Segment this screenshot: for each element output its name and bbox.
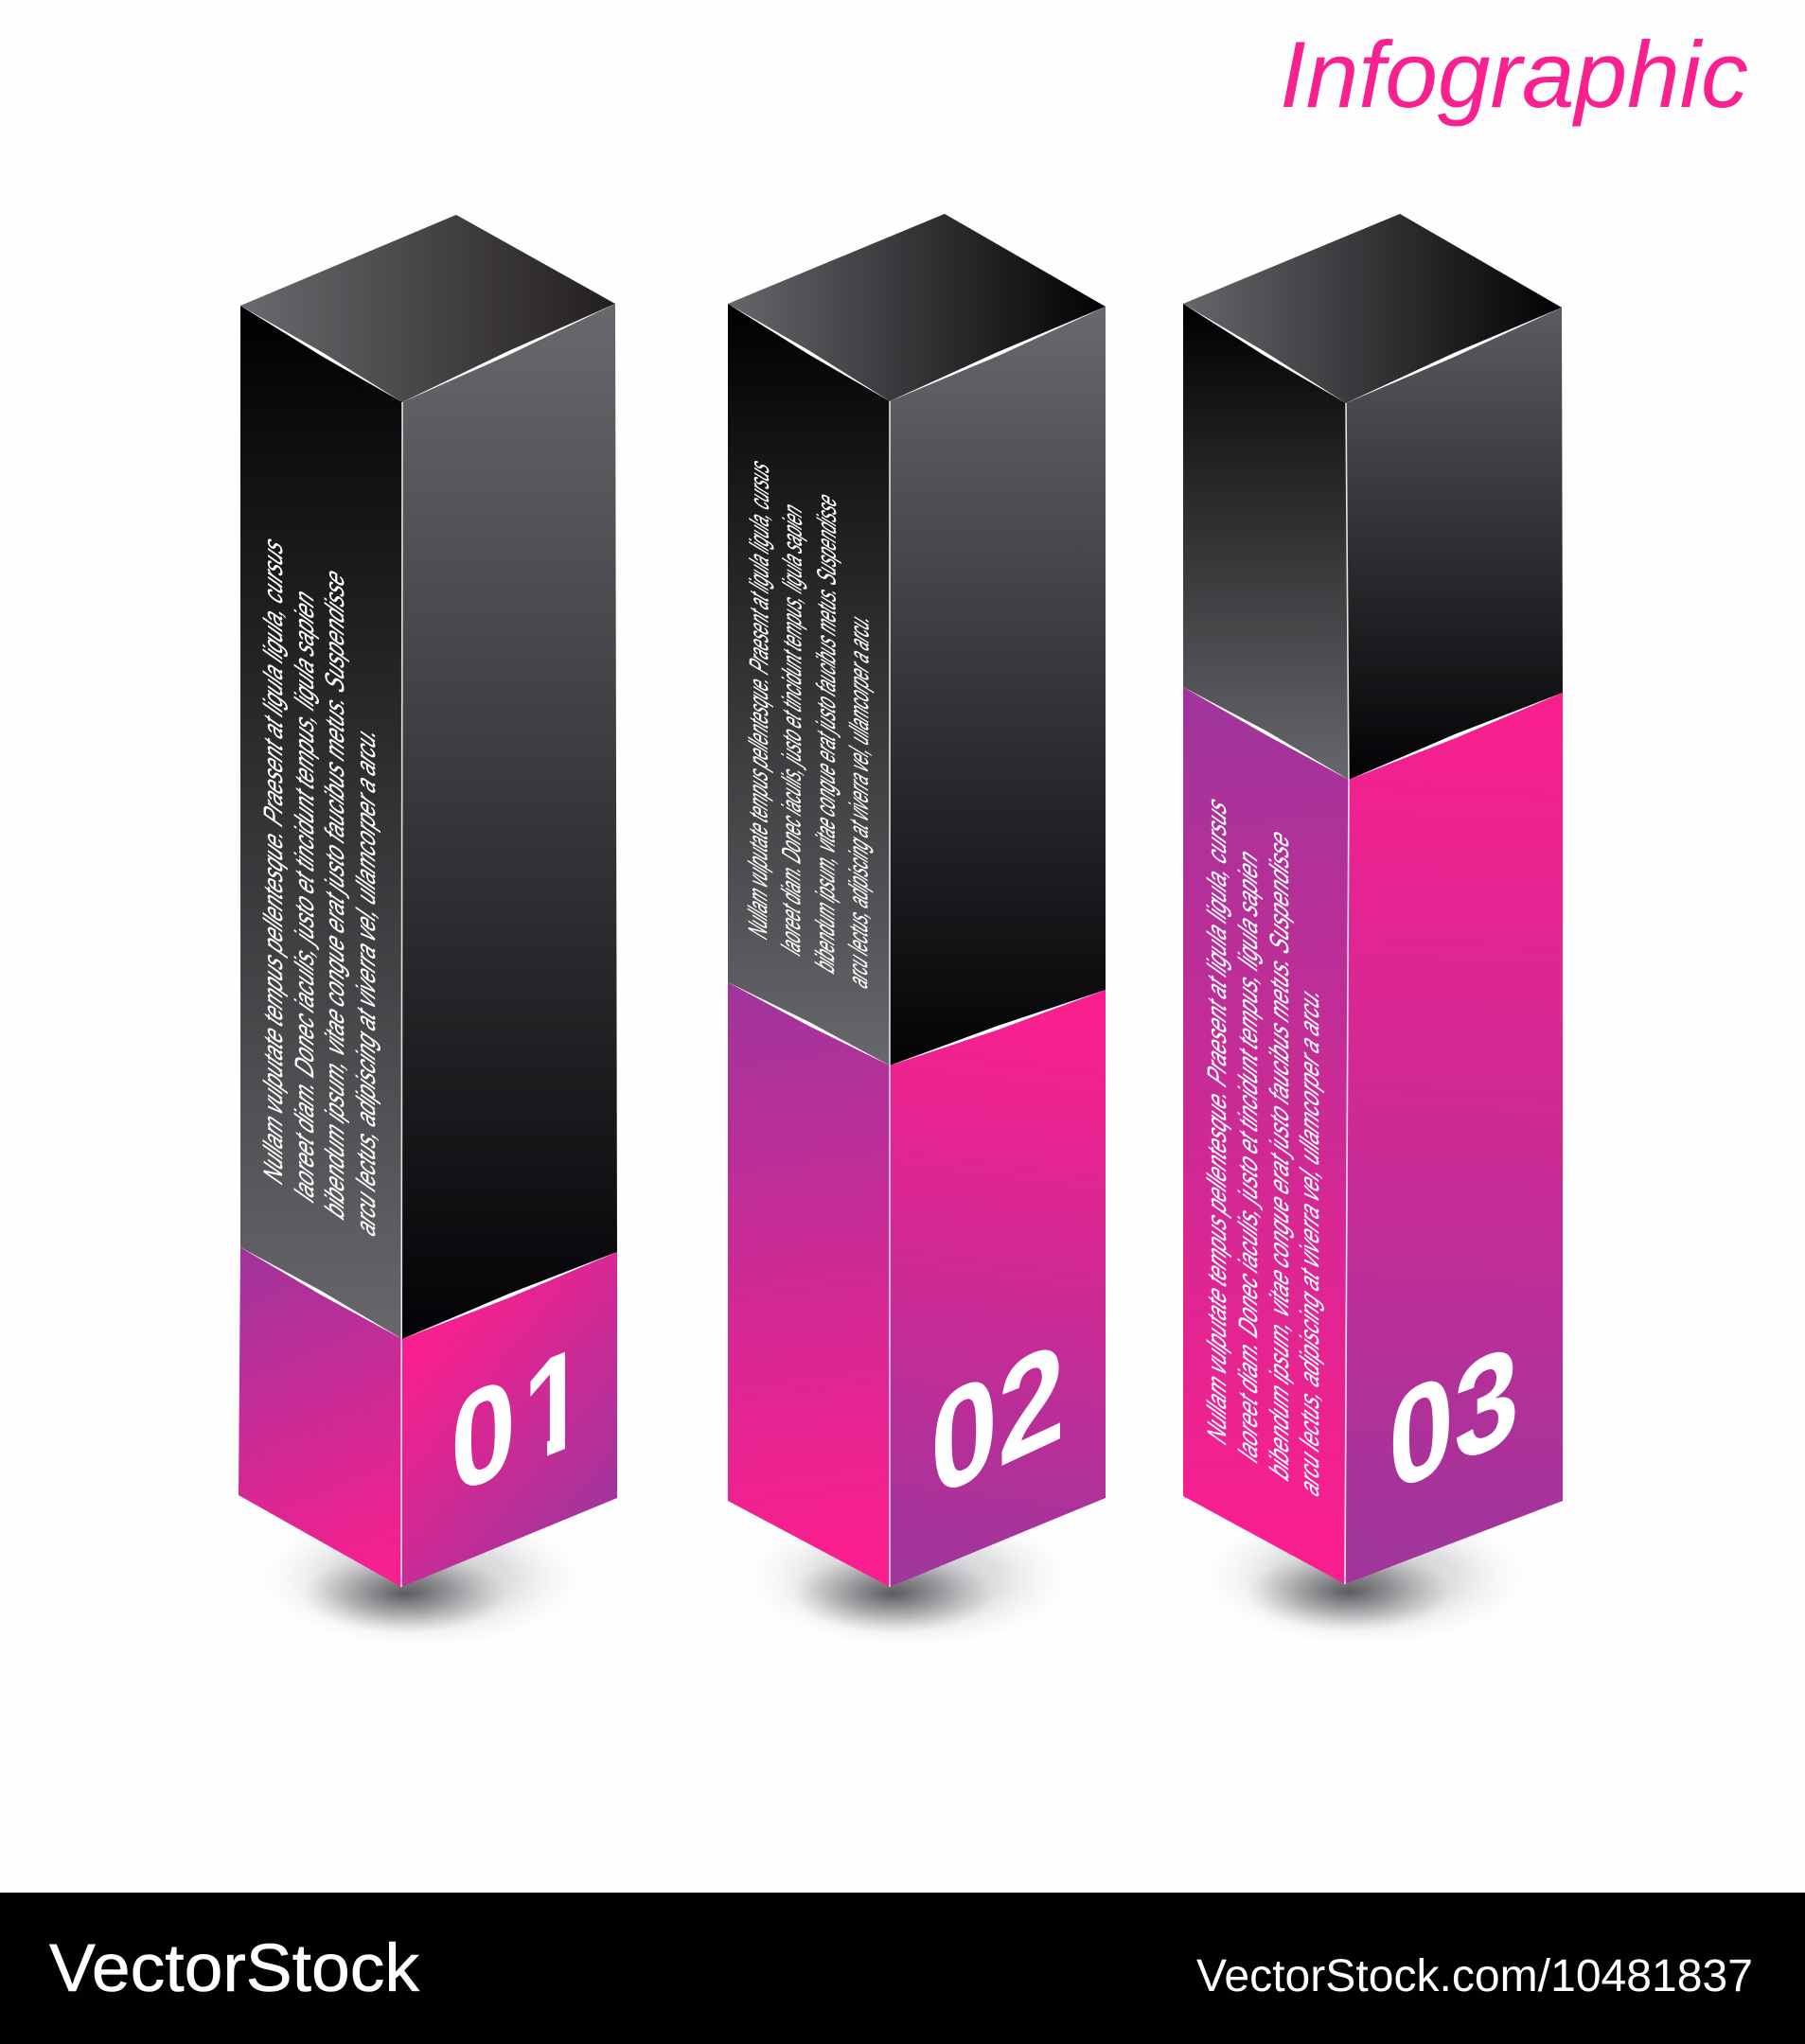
number 01: 0 bbox=[451, 1347, 516, 1524]
text block: column 01 bbox=[259, 533, 381, 1242]
text block: column 02: laoreet diam. Donec iaculis, justo et tincidunt tempus, ligula sapien bbox=[776, 499, 807, 960]
text block: column 02: Nullam vulputate tempus pellentesque. Praesent at ligula ligula, cursus bbox=[743, 455, 775, 943]
text block: column 03: Nullam vulputate tempus pellentesque. Praesent at ligula ligula, cursus bbox=[1203, 792, 1232, 1450]
top face: column 02 bbox=[728, 214, 1106, 401]
shadow: column 02 bbox=[746, 1508, 1071, 1648]
text block: column 02 bbox=[743, 455, 875, 993]
shadow: column 01 bbox=[258, 1508, 584, 1648]
dark right face: column 01 bbox=[402, 304, 617, 1339]
footer logo: VectorStock bbox=[49, 1931, 420, 2006]
highlight edges: column 03 bbox=[1183, 304, 1563, 1584]
panel: column 02 bbox=[728, 214, 1106, 1648]
footer image id: VectorStock.com/10481837 bbox=[1196, 1951, 1753, 2001]
dark left face: column 01 bbox=[240, 306, 402, 1339]
panel: column 03 bbox=[1183, 214, 1563, 1647]
dark right face: column 03 bbox=[1346, 308, 1563, 780]
dark left face: column 02 bbox=[728, 304, 890, 1066]
panel: column 01 bbox=[239, 215, 617, 1648]
pink right face: column 02 bbox=[890, 990, 1106, 1587]
text block: column 01: arcu lectus, adipiscing at viverra vel, ullamcorper a arcu. bbox=[352, 720, 381, 1242]
shadow: column 03 bbox=[1202, 1507, 1528, 1647]
dark left face: column 03 bbox=[1183, 304, 1349, 780]
text block: column 01: laoreet diam. Donec iaculis, justo et tincidunt tempus, ligula sapien bbox=[291, 585, 320, 1207]
pink right face: column 03 bbox=[1345, 693, 1563, 1584]
text block: column 03: laoreet diam. Donec iaculis, justo et tincidunt tempus, ligula sapien bbox=[1234, 844, 1264, 1468]
pink right face: column 01 bbox=[401, 1252, 617, 1587]
dark right face: column 02 bbox=[890, 307, 1106, 1066]
text block: column 03: arcu lectus, adipiscing at viverra vel, ullamcorper a arcu. bbox=[1296, 979, 1325, 1502]
text block: column 02: bibendum ipsum, vitae congue erat justo faucibus metus. Suspendisse bbox=[810, 488, 842, 978]
text block: column 01: bibendum ipsum, vitae congue erat justo faucibus metus. Suspendisse bbox=[321, 564, 350, 1225]
highlight edges: column 02 bbox=[728, 304, 1106, 1587]
footer band bbox=[0, 1893, 1805, 2044]
text block: column 03 bbox=[1203, 792, 1325, 1502]
number 01: 1 bbox=[522, 1313, 588, 1496]
highlight edges: column 01 bbox=[240, 304, 617, 1587]
top face: column 01 bbox=[240, 215, 615, 402]
pink left face: column 03 bbox=[1183, 687, 1349, 1584]
top face: column 03 bbox=[1183, 214, 1562, 403]
text block: column 02: arcu lectus, adipiscing at viverra vel, ullamcorper a arcu. bbox=[843, 608, 875, 993]
number 03: 03 bbox=[1389, 1313, 1519, 1523]
number 02: 02 bbox=[930, 1309, 1065, 1529]
number 01 bbox=[454, 1351, 565, 1486]
text block: column 01: Nullam vulputate tempus pellentesque. Praesent at ligula ligula, cursus bbox=[259, 533, 289, 1189]
text block: column 03: bibendum ipsum, vitae congue erat justo faucibus metus. Suspendisse bbox=[1265, 824, 1295, 1486]
pink left face: column 01 bbox=[239, 1247, 402, 1587]
pink left face: column 02 bbox=[728, 982, 890, 1587]
title: Infographic bbox=[1280, 22, 1748, 127]
